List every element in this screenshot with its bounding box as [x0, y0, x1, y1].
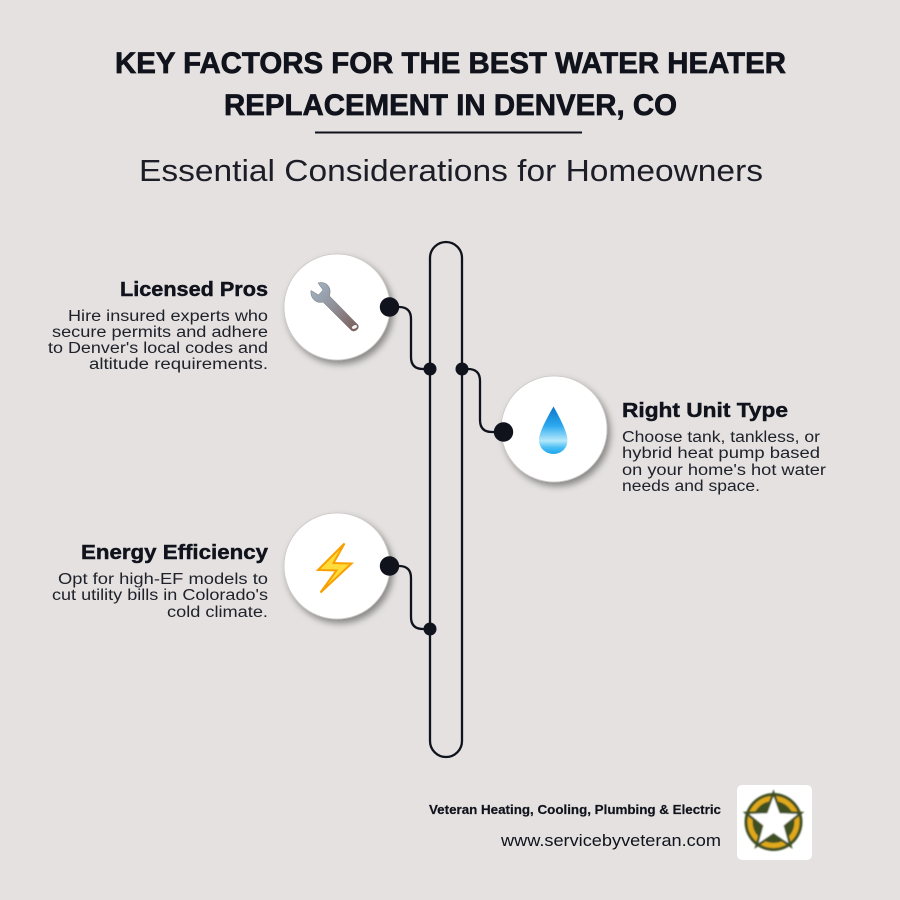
- text: licensed pros description: Hire insured experts who: [68, 308, 268, 325]
- central track: [430, 242, 462, 757]
- icon: wrench: [311, 282, 358, 331]
- logo: [737, 785, 812, 860]
- connector dot large: [380, 556, 399, 576]
- connector: right unit type: [462, 369, 503, 432]
- title: [115, 47, 786, 122]
- text: licensed pros description: altitude requirements.: [89, 356, 268, 373]
- heading: licensed pros: Licensed Pros: [120, 278, 268, 301]
- panel: energy efficiency: [52, 513, 436, 636]
- footer url: www.servicebyveteran.com: [500, 831, 721, 850]
- icon: lightning bolt: [318, 544, 352, 592]
- text: right unit type description: Choose tank, tankless, or: [622, 429, 820, 446]
- title: REPLACEMENT IN DENVER, CO: [224, 89, 677, 122]
- icon circle: lightning bolt: [284, 513, 390, 619]
- connector: energy efficiency: [389, 566, 430, 629]
- text: right unit type description: hybrid heat pump based: [622, 445, 820, 462]
- text: licensed pros description: to Denver's local codes and: [48, 340, 268, 357]
- text: right unit type description: on your home's hot water: [622, 462, 826, 479]
- panel: licensed pros: [48, 254, 436, 376]
- text: energy efficiency description: cold climate.: [167, 604, 268, 621]
- heading: energy efficiency: Energy Efficiency: [81, 541, 269, 564]
- subtitle: Essential Considerations for Homeowners: [139, 153, 763, 188]
- panel: right unit type: [456, 362, 826, 495]
- connector dot large: [380, 297, 399, 317]
- title: KEY FACTORS FOR THE BEST WATER HEATER: [115, 47, 786, 80]
- icon circle: wrench: [284, 254, 390, 360]
- connector dot small: [456, 362, 468, 376]
- heading: right unit type: Right Unit Type: [622, 399, 788, 422]
- icon: water drop: [539, 406, 568, 454]
- connector dot large: [494, 422, 513, 442]
- text: energy efficiency description: [52, 571, 268, 621]
- text: right unit type description: needs and space.: [622, 478, 760, 495]
- text: licensed pros description: secure permits and adhere: [52, 324, 268, 341]
- footer company name: Veteran Heating, Cooling, Plumbing & Electric: [429, 802, 721, 817]
- text: right unit type description: [622, 429, 826, 495]
- text: energy efficiency description: Opt for high-EF models to: [58, 571, 268, 588]
- text: energy efficiency description: cut utility bills in Colorado's: [52, 587, 268, 604]
- icon circle: water drop: [501, 376, 607, 482]
- text: licensed pros description: [48, 308, 268, 373]
- connector dot small: [424, 622, 436, 636]
- connector: licensed pros: [389, 307, 430, 369]
- connector dot small: [424, 362, 436, 376]
